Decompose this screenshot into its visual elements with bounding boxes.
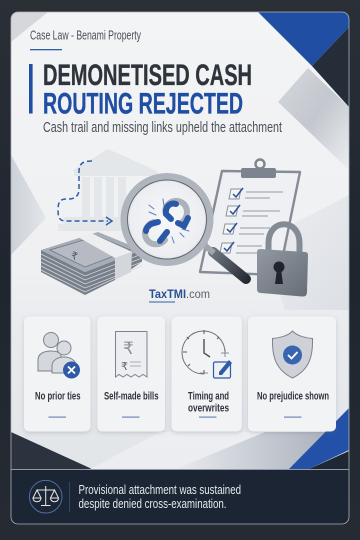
icon: receipt: ₹ xyxy=(123,339,134,359)
label: Timing and xyxy=(188,390,229,402)
title: DEMONETISED CASH xyxy=(43,59,252,92)
illustration: magnifier with broken chain xyxy=(124,176,246,279)
subtitle: Cash trail and missing links upheld the attachment xyxy=(43,120,282,136)
card: no prejudice shown xyxy=(248,316,336,432)
brand mark: .com xyxy=(186,289,210,301)
eyebrow label: Case Law - Benami Property xyxy=(30,28,142,42)
illustration: dashed route arrow xyxy=(58,161,112,225)
card: no prior ties xyxy=(24,316,90,432)
illustration: cash stack: ₹ xyxy=(69,250,79,263)
illustration: clipboard xyxy=(200,160,300,275)
callout text: Provisional attachment was sustained xyxy=(78,482,241,497)
eyebrow label xyxy=(30,28,142,50)
icon: clock and edit xyxy=(182,330,232,378)
icon: scales of justice xyxy=(29,480,62,513)
callout text xyxy=(78,482,241,511)
card: timing and overwrites xyxy=(172,316,242,432)
label: No prior ties xyxy=(35,390,80,402)
icon: shield with check xyxy=(272,331,313,378)
brand mark xyxy=(149,287,210,302)
footer callout xyxy=(29,480,241,513)
title: ROUTING REJECTED xyxy=(43,88,243,120)
icon: receipt xyxy=(116,332,147,377)
icon: people with cross xyxy=(38,332,80,378)
label: Self-made bills xyxy=(104,390,158,402)
illustration: padlock xyxy=(257,224,308,297)
card: timing and overwrites: overwrites xyxy=(188,402,229,414)
illustration: courthouse xyxy=(58,149,158,231)
illustration: cash stack xyxy=(41,232,142,295)
label: No prejudice shown xyxy=(257,390,329,402)
callout text: despite denied cross-examination. xyxy=(78,496,226,511)
brand mark: TaxTMI xyxy=(149,287,186,301)
card: self-made bills xyxy=(97,316,165,432)
title xyxy=(29,59,252,120)
icon: receipt: ₹ xyxy=(121,360,128,373)
